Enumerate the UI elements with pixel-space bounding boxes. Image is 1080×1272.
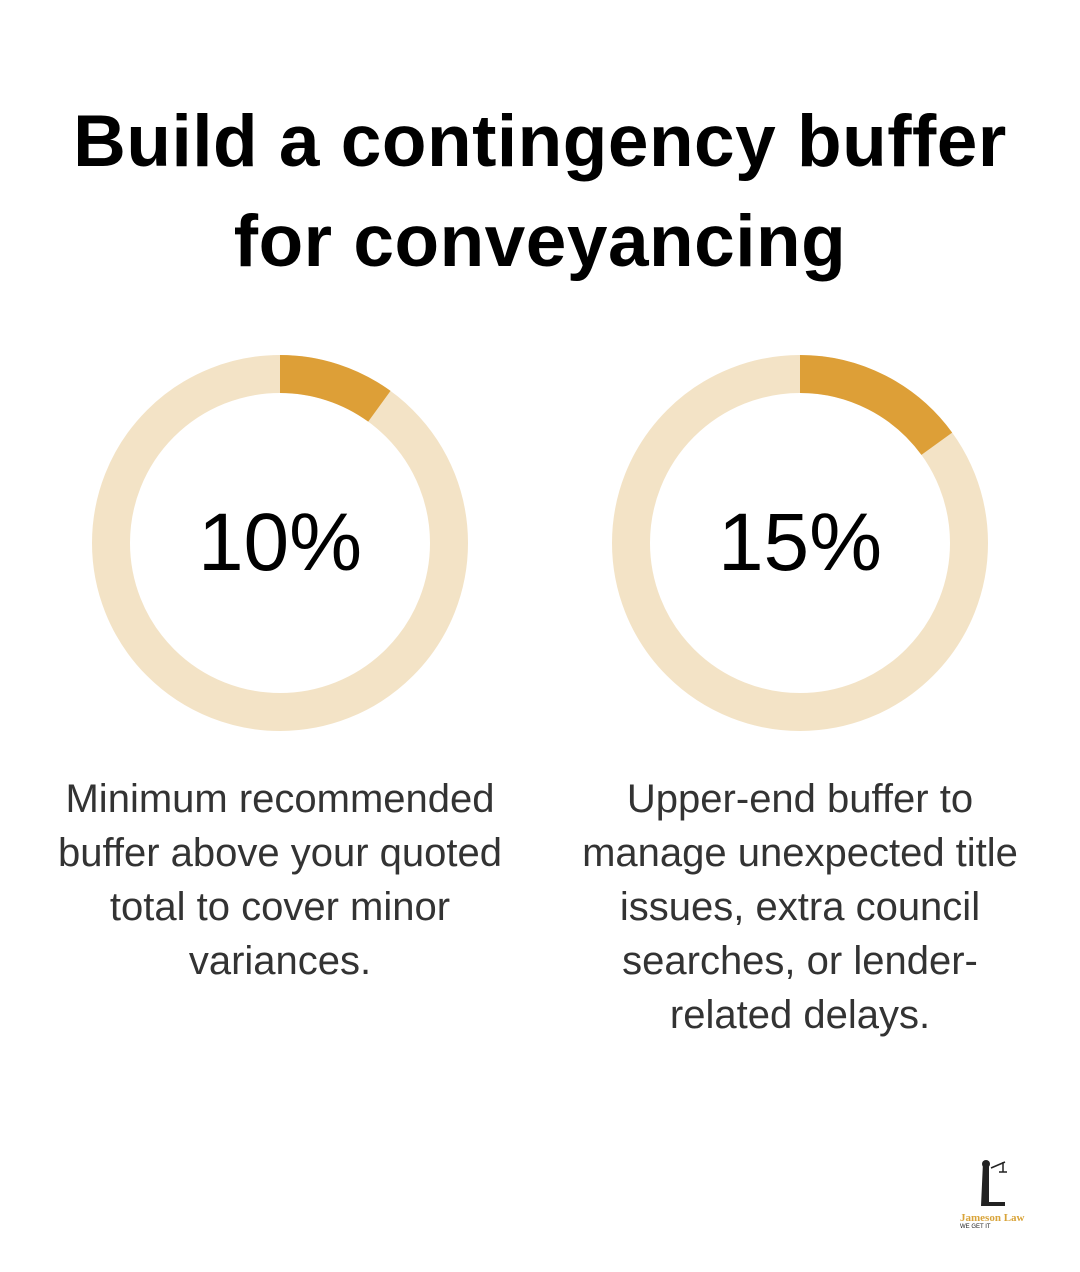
- description: 10%: variances.: [189, 939, 371, 983]
- description: 15%: issues, extra council: [620, 885, 980, 929]
- logo: WE GET IT: [960, 1224, 991, 1230]
- logo: Jameson Law: [960, 1212, 1024, 1224]
- logo: [960, 1160, 1024, 1230]
- description: 15%: Upper-end buffer to: [627, 777, 973, 821]
- donut: 10%: [92, 355, 468, 731]
- description: 10%: buffer above your quoted: [58, 831, 502, 875]
- description: 15%: searches, or lender-: [622, 939, 978, 983]
- description: 15%: manage unexpected title: [582, 831, 1018, 875]
- description: 10%: [58, 777, 502, 983]
- donut: 15%: [612, 355, 988, 731]
- description: 15%: [582, 777, 1018, 1037]
- donut: 10%: 10%: [198, 497, 362, 588]
- description: 15%: related delays.: [670, 993, 930, 1037]
- title: [73, 101, 1007, 282]
- title: for conveyancing: [234, 201, 846, 282]
- description: 10%: total to cover minor: [110, 885, 450, 929]
- donut: 15%: 15%: [718, 497, 882, 588]
- title: Build a contingency buffer: [73, 101, 1007, 182]
- description: 10%: Minimum recommended: [65, 777, 495, 821]
